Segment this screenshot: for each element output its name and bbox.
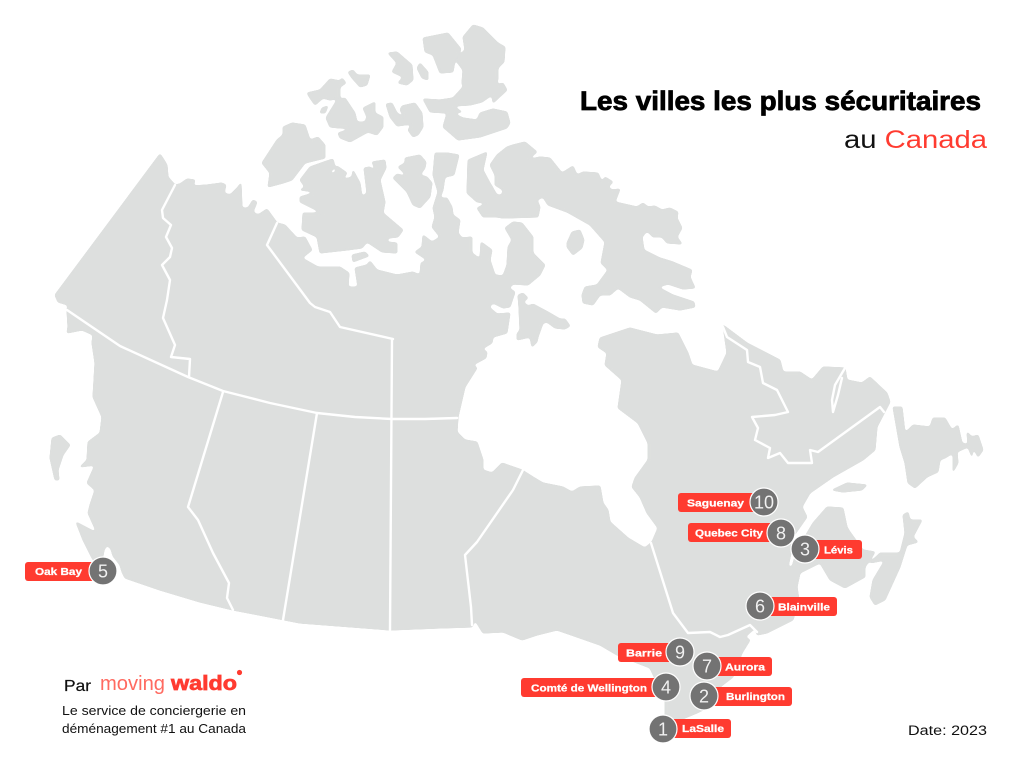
city marker: Quebec City: 8 xyxy=(776,524,786,544)
Axel Heiberg Island xyxy=(423,33,461,73)
city marker: Lévis: 3 xyxy=(800,540,810,560)
city marker: Quebec City xyxy=(688,519,795,547)
city marker: Oak Bay: 5 xyxy=(98,562,108,582)
city marker: Oak Bay: Oak Bay xyxy=(35,566,82,578)
city marker: Aurora: Aurora xyxy=(725,662,765,674)
Manitoba and Ontario border xyxy=(465,470,523,625)
logo: moving waldo: waldo xyxy=(170,673,237,695)
British Columbia and Alberta border xyxy=(188,392,233,610)
city marker: Blainville: 6 xyxy=(755,596,765,616)
city marker: Barrie xyxy=(618,638,694,666)
King William Island xyxy=(352,252,369,262)
city marker: Saguenay xyxy=(678,488,778,516)
Newfoundland xyxy=(893,407,983,488)
Quebec and Labrador border xyxy=(723,327,884,463)
tagline xyxy=(62,704,246,736)
city marker: LaSalle: LaSalle xyxy=(682,723,724,735)
city marker: Comté de Wellington: 4 xyxy=(661,678,671,698)
provincial borders xyxy=(67,185,884,637)
Ellef Ringnes Island xyxy=(388,52,413,85)
Northwest Territories and Nunavut border xyxy=(267,223,393,339)
Eglinton Island xyxy=(320,106,328,113)
city marker: Comté de Wellington xyxy=(521,673,680,701)
Prince Charles Island xyxy=(567,230,584,255)
city marker: Aurora: 7 xyxy=(702,656,712,676)
logo: moving waldo xyxy=(100,670,242,695)
city marker: Lévis xyxy=(791,535,862,563)
city marker: Burlington xyxy=(690,682,792,710)
city marker: Burlington: Burlington xyxy=(726,691,785,703)
city marker: Blainville: Blainville xyxy=(778,602,830,614)
branding block xyxy=(62,670,246,736)
city marker: Aurora xyxy=(693,652,772,680)
city marker: Quebec City: Quebec City xyxy=(695,528,763,540)
Borden Island xyxy=(348,70,370,87)
city marker: LaSalle: 1 xyxy=(658,720,668,740)
city marker: Blainville xyxy=(746,592,837,620)
mainland xyxy=(55,153,890,723)
Bathurst Island xyxy=(386,103,423,137)
city marker: Comté de Wellington: Comté de Wellington xyxy=(531,682,647,694)
Ellesmere and Devon Islands xyxy=(423,25,510,140)
city marker: Barrie: 9 xyxy=(675,642,685,662)
city marker: Burlington: 2 xyxy=(699,686,709,706)
Hamilton Inlet xyxy=(832,368,845,412)
city marker: Oak Bay xyxy=(25,557,117,585)
Prince of Wales Island xyxy=(393,155,432,208)
date: Date: 2023 xyxy=(908,723,987,738)
Saskatchewan and Manitoba border xyxy=(390,339,392,630)
city marker: Lévis: Lévis xyxy=(824,544,853,556)
Anticosti Island xyxy=(832,483,867,492)
tagline: déménagement #1 au Canada xyxy=(62,722,246,736)
Banks Island xyxy=(262,123,325,187)
Melville Island xyxy=(326,98,383,142)
Nova Scotia and Prince Edward Island xyxy=(870,512,922,605)
tagline: Le service de conciergerie en xyxy=(62,704,246,718)
Southampton Island xyxy=(517,293,570,347)
Yukon and Northwest Territories border xyxy=(162,185,190,377)
logo: moving waldo: moving xyxy=(100,673,165,695)
Ontario and Quebec border xyxy=(651,543,757,637)
city marker: Saguenay: Saguenay xyxy=(687,498,744,510)
heading line 1: Les villes les plus sécuritaires xyxy=(580,86,981,116)
Haida Gwaii xyxy=(50,435,70,480)
Alberta and Saskatchewan border xyxy=(283,413,317,620)
city marker: Barrie: Barrie xyxy=(626,648,662,660)
city marker: Saguenay: 10 xyxy=(754,492,774,512)
Prince Patrick Island xyxy=(307,78,346,105)
title xyxy=(580,86,987,154)
heading line 2: au Canada xyxy=(844,126,987,154)
Victoria Island xyxy=(300,159,403,253)
Amund Ringnes Island xyxy=(417,63,428,80)
city marker: LaSalle xyxy=(649,715,731,743)
Baffin Island xyxy=(467,142,695,313)
Par label: Par xyxy=(64,678,92,695)
60th parallel border xyxy=(67,310,457,419)
